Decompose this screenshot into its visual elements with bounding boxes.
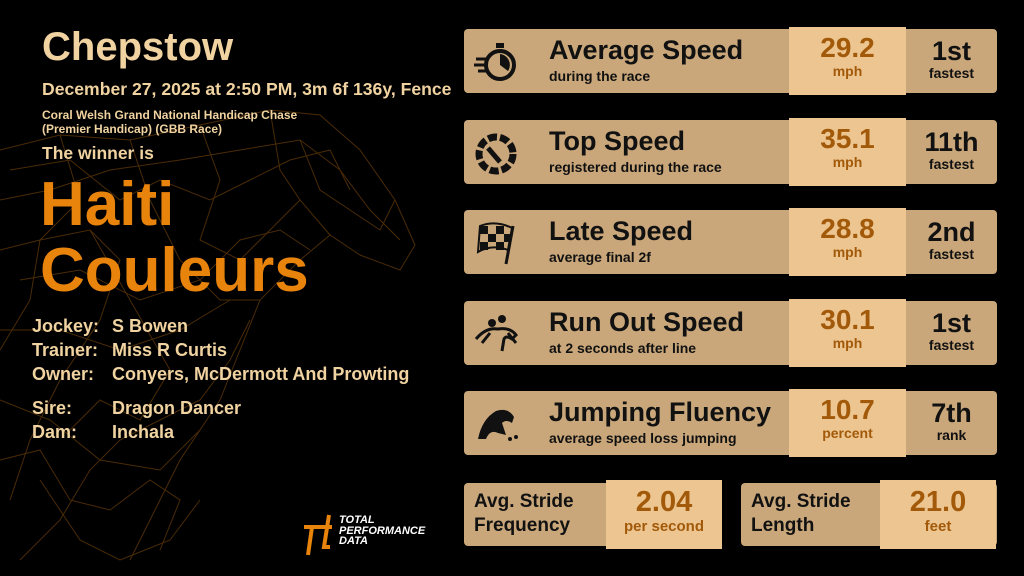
- icon: checkered flag: [476, 222, 514, 264]
- connections: Jockey:: [32, 316, 99, 336]
- pedigree: Dam:: [32, 422, 77, 442]
- panel: late speed: mph: [833, 244, 862, 260]
- panel: stride length: 21.0: [910, 486, 966, 518]
- panel: stride frequency: Frequency: [474, 515, 570, 536]
- panel: jumping fluency: 7th: [931, 398, 972, 428]
- race info: December 27, 2025 at 2:50 PM, 3m 6f 136y, Fence: [42, 79, 451, 99]
- panel: run out speed: Run Out Speed: [549, 307, 744, 337]
- panel: stride length: Avg. Stride: [751, 491, 851, 512]
- panel: late speed: [464, 210, 997, 274]
- panel: late speed: average final 2f: [549, 249, 651, 265]
- pedigree: [32, 398, 241, 442]
- panel: average speed: [464, 29, 997, 93]
- panel: top speed: Top Speed: [549, 126, 685, 156]
- panel: run out speed: 30.1: [820, 304, 875, 335]
- panel: late speed: 2nd: [927, 217, 976, 247]
- horse name: [40, 170, 309, 305]
- panel: top speed: 35.1: [820, 123, 875, 154]
- title: Chepstow: [42, 25, 233, 69]
- connections: S Bowen: [112, 316, 188, 336]
- panel: average speed: 1st: [932, 36, 971, 66]
- panel: run out speed: fastest: [929, 337, 974, 353]
- horse name: Haiti: [40, 170, 174, 239]
- panel: average speed: during the race: [549, 68, 650, 84]
- panel: average speed: 29.2: [820, 32, 875, 63]
- panel: run out speed: at 2 seconds after line: [549, 340, 696, 356]
- icon: stopwatch: [474, 43, 516, 81]
- panel: run out speed: 1st: [932, 308, 971, 338]
- panel: stride length: [741, 483, 997, 546]
- icon: racehorse: [474, 315, 518, 352]
- race name: (Premier Handicap) (GBB Race): [42, 122, 222, 136]
- panel: run out speed: mph: [833, 335, 862, 351]
- panel: late speed: fastest: [929, 246, 974, 262]
- icon: jumping horse: [478, 410, 518, 441]
- panel: late speed: Late Speed: [549, 216, 693, 246]
- icon: speedometer: [476, 134, 516, 174]
- connections: Trainer:: [32, 340, 98, 360]
- panel: run out speed: [464, 301, 997, 365]
- panel: jumping fluency: [464, 391, 997, 455]
- panel: top speed: [464, 120, 997, 184]
- horse name: Couleurs: [40, 236, 309, 305]
- pedigree: Inchala: [112, 422, 174, 442]
- panel: jumping fluency: 10.7: [820, 394, 875, 425]
- panel: jumping fluency: Jumping Fluency: [549, 397, 771, 427]
- panel: stride length: feet: [925, 518, 951, 535]
- logo: TOTAL: [339, 514, 375, 526]
- panel: average speed: fastest: [929, 65, 974, 81]
- panel: jumping fluency: average speed loss jumping: [549, 430, 737, 446]
- pedigree: Dragon Dancer: [112, 398, 241, 418]
- connections: Miss R Curtis: [112, 340, 227, 360]
- panel: late speed: 28.8: [820, 213, 875, 244]
- panel: top speed: registered during the race: [549, 159, 722, 175]
- pedigree: Sire:: [32, 398, 72, 418]
- background: horse mesh: [0, 110, 416, 560]
- race name: [42, 108, 297, 136]
- panel: stride frequency: per second: [624, 518, 704, 535]
- logo: DATA: [339, 535, 368, 547]
- panel: stride frequency: 2.04: [636, 486, 692, 518]
- connections: [32, 316, 409, 384]
- logo: [304, 514, 426, 556]
- panel: top speed: fastest: [929, 156, 974, 172]
- panel: top speed: 11th: [924, 127, 979, 157]
- connections: Conyers, McDermott And Prowting: [112, 364, 409, 384]
- panel: stride length: Length: [751, 515, 814, 536]
- panel: jumping fluency: rank: [937, 427, 966, 443]
- panel: average speed: Average Speed: [549, 35, 743, 65]
- logo: PERFORMANCE: [339, 524, 425, 536]
- race name: Coral Welsh Grand National Handicap Chase: [42, 108, 297, 122]
- panel: jumping fluency: percent: [822, 425, 873, 441]
- panel: top speed: mph: [833, 154, 862, 170]
- panel: average speed: mph: [833, 63, 862, 79]
- connections: Owner:: [32, 364, 94, 384]
- panel: stride frequency: [464, 483, 720, 546]
- winner label: The winner is: [42, 143, 154, 163]
- panel: stride frequency: Avg. Stride: [474, 491, 574, 512]
